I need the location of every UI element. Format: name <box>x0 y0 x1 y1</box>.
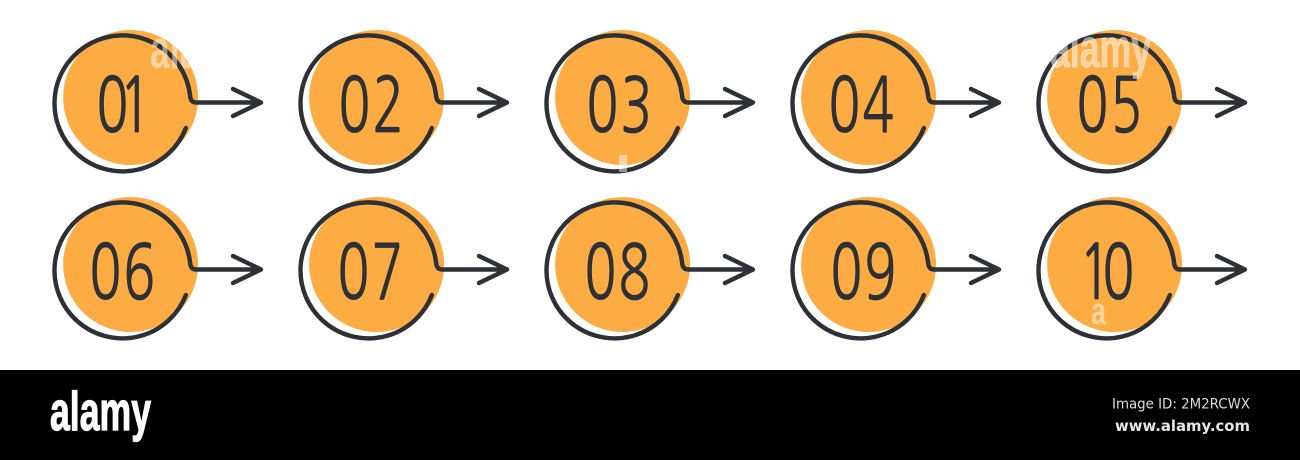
item 02 <box>301 30 507 171</box>
item 06 <box>55 197 261 338</box>
item 06: 06 <box>90 235 157 311</box>
item 03 <box>547 30 753 171</box>
item 05: 05 <box>1076 68 1144 144</box>
item 01 <box>55 30 261 171</box>
item 09 <box>793 197 999 338</box>
item 10 <box>1039 197 1245 338</box>
website: www.alamy.com <box>1115 417 1250 435</box>
watermark on item 10: a <box>1091 291 1107 333</box>
image id: Image ID: 2M2RCWX <box>1112 396 1250 412</box>
item 08 <box>547 197 753 338</box>
item 07: 07 <box>338 235 405 311</box>
watermark on item 01: alamy <box>150 18 251 80</box>
item 10: 10 <box>1079 235 1131 311</box>
item 03: 03 <box>586 68 654 144</box>
item 04: 04 <box>828 68 896 144</box>
item 01: 01 <box>96 68 142 144</box>
item 08: 08 <box>584 235 652 311</box>
item 09: 09 <box>830 235 898 311</box>
item 04 <box>793 30 999 171</box>
item 05 <box>1039 30 1245 171</box>
watermark on item 03 <box>619 155 627 172</box>
item 02: 02 <box>338 68 406 144</box>
alamy logo: alamy <box>50 380 151 442</box>
watermark on item 05: alamy <box>1050 17 1151 79</box>
footer band <box>0 370 1300 460</box>
item 07 <box>301 197 507 338</box>
